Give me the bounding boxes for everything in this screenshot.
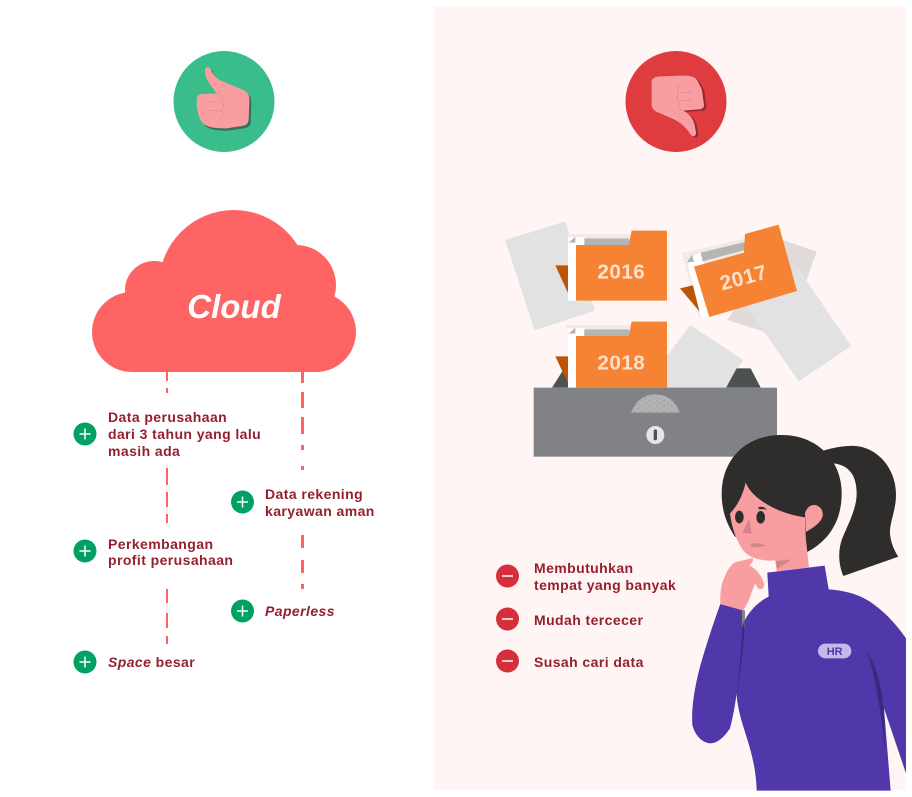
dark drawer dividers: [552, 367, 761, 388]
grey sliver behind arm: [742, 610, 745, 628]
pro item: perkembangan: [74, 536, 233, 568]
folder 2017: [680, 225, 797, 319]
pro item: data perusahaan: masih ada: [108, 443, 180, 459]
con item: tempat banyak: tempat yang banyak: [534, 577, 676, 593]
drawer body: [534, 388, 777, 457]
icon: minus: [496, 608, 519, 630]
drawer lock: [646, 426, 664, 444]
pro item: data rekening: karyawan aman: [265, 503, 375, 519]
face: [730, 482, 806, 561]
folder 2018: 2018: [597, 351, 645, 374]
pro item: data perusahaan: Data perusahaan: [108, 409, 227, 425]
icon: minus: [496, 564, 519, 588]
con item: susah cari: [496, 650, 644, 672]
folder 2018: [555, 322, 667, 388]
mouth: [750, 543, 766, 547]
eyes: [735, 507, 767, 524]
ear: [805, 505, 823, 532]
torso: [737, 566, 906, 791]
loose papers: [505, 221, 851, 390]
pro item: space besar: Space besar: [108, 654, 195, 670]
drawer handle: [631, 394, 680, 413]
folder 2016: 2016: [597, 260, 645, 283]
badge: HR: [827, 646, 843, 658]
con item: tercecer: Mudah tercecer: [534, 612, 643, 628]
con item: tempat banyak: Membutuhkan: [534, 560, 634, 576]
badge: [818, 644, 851, 658]
icon: plus: [74, 422, 96, 446]
icon: plus: [74, 650, 96, 674]
person: HR worker: [692, 435, 906, 791]
pro item: space besar: [74, 650, 195, 674]
pro item: perkembangan: profit perusahaan: [108, 552, 233, 568]
icon: plus: [74, 540, 96, 562]
icon: minus: [496, 650, 519, 672]
neck shadow: [776, 559, 792, 569]
pro item: data rekening: [231, 486, 375, 519]
pro item: perkembangan: Perkembangan: [108, 536, 213, 552]
pro item: data rekening: Data rekening: [265, 486, 363, 502]
panel: right background: [434, 6, 906, 790]
pro item: data perusahaan: [74, 409, 261, 459]
pro item: paperless: [231, 600, 335, 622]
folder 2016: [555, 231, 667, 301]
icon: thumbs down: [626, 51, 726, 152]
con item: susah cari: Susah cari data: [534, 654, 644, 670]
hair back: [722, 435, 842, 552]
con item: tempat banyak: [496, 560, 676, 593]
nose: [742, 519, 752, 534]
arm crease: [737, 620, 745, 693]
pro item: data perusahaan: dari 3 tahun yang lalu: [108, 426, 261, 442]
con item: tercecer: [496, 608, 643, 630]
icon: plus: [231, 490, 254, 514]
folder 2017: 2017: [718, 261, 770, 295]
dashed connector left: [166, 372, 168, 644]
neck: [775, 540, 809, 571]
filing drawer illustration: [505, 221, 851, 457]
icon: thumbs up: [174, 51, 274, 152]
dashed connector right: [301, 372, 304, 589]
torso crease: [867, 652, 885, 752]
sleeve: [692, 604, 743, 743]
pro item: paperless: Paperless: [265, 603, 335, 619]
ponytail: [823, 446, 898, 576]
hand: [720, 558, 764, 610]
cloud label: Cloud: [187, 288, 282, 325]
cloud: [92, 210, 356, 372]
icon: plus: [231, 600, 254, 622]
